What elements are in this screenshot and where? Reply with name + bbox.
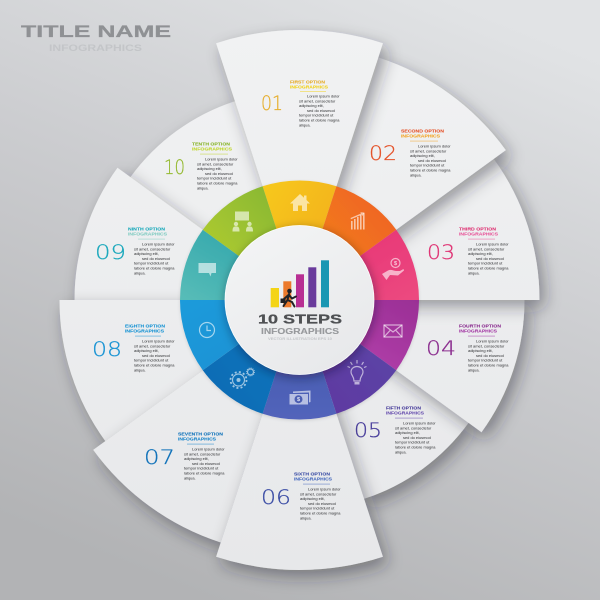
panel: sixth option xyxy=(216,300,383,570)
panel: third option: THIRD OPTION xyxy=(459,227,497,232)
panel: first option: Lorem ipsum dolor xyxy=(307,94,340,98)
panel: second option: INFOGRAPHICS xyxy=(401,134,440,139)
heading: 10 steps xyxy=(258,311,342,341)
ring segment 3 xyxy=(300,230,419,300)
panel: second option xyxy=(300,58,506,300)
panel: seventh option: aliqua. xyxy=(184,475,196,480)
heading: 10 steps: VECTOR ILLUSTRATION EPS 10 xyxy=(268,337,332,341)
panel: ninth option: NINTH OPTION xyxy=(128,227,166,232)
panel: eighth option: labore et dolore magna xyxy=(134,362,175,368)
panel: third option: sit amet, consectetur xyxy=(468,246,505,251)
panel: sixth option: sed do eiusmod xyxy=(308,501,336,506)
panel: first option: 01 xyxy=(261,92,283,115)
panel: eighth option: 08 xyxy=(92,338,122,361)
panel: eighth option: Lorem ipsum dolor xyxy=(142,338,175,344)
panel: eighth option: adipiscing elit, xyxy=(134,348,159,353)
colour ring xyxy=(180,180,419,420)
panel: seventh option: SEVENTH OPTION xyxy=(178,432,224,437)
panel: eighth option xyxy=(59,300,300,441)
panel: seventh option: sit amet, consectetur xyxy=(184,451,221,456)
panel: fifth option: tempor incididunt ut xyxy=(395,440,430,445)
icon: banknote: $ xyxy=(297,397,300,403)
panel: ninth option: INFOGRAPHICS xyxy=(128,232,167,237)
panel: fifth option xyxy=(300,300,469,499)
panel: ninth option xyxy=(74,168,300,300)
panel: ninth option: 09 xyxy=(95,241,126,264)
panel: fourth option: sit amet, consectetur xyxy=(468,343,505,348)
panel: tenth option: INFOGRAPHICS xyxy=(192,147,232,152)
ring segment 1 xyxy=(263,180,336,300)
panel: third option: INFOGRAPHICS xyxy=(459,232,498,237)
panel: second option: aliqua. xyxy=(410,172,422,177)
panel: tenth option: sit amet, consectetur xyxy=(197,161,234,166)
panel: ninth option: labore et dolore magna xyxy=(134,266,175,270)
panel: third option: tempor incididunt ut xyxy=(468,261,503,266)
icon: growth chart xyxy=(350,212,365,230)
icon: hand with coin: $ xyxy=(394,261,397,267)
panel: second option: sed do eiusmod xyxy=(418,158,446,163)
panel: fifth option: labore et dolore magna xyxy=(395,444,436,450)
icon: running businessman xyxy=(280,289,296,306)
icon: banknote xyxy=(290,390,310,404)
panel: first option: INFOGRAPHICS xyxy=(290,85,328,90)
panel: tenth option: Lorem ipsum dolor xyxy=(205,156,238,162)
ring segment 5 xyxy=(300,300,396,414)
panel: seventh option: sed do eiusmod xyxy=(192,461,220,466)
icon: people and board xyxy=(232,212,253,232)
panel: fourth option: FOURTH OPTION xyxy=(459,324,502,329)
panel: third option: Lorem ipsum dolor xyxy=(476,242,509,246)
panel: sixth option: Lorem ipsum dolor xyxy=(308,486,341,492)
panel: sixth option: labore et dolore magna xyxy=(300,510,341,516)
panel: sixth option: 06 xyxy=(261,486,291,509)
panel: sixth option: INFOGRAPHICS xyxy=(294,477,332,482)
panel: second option: 02 xyxy=(369,142,397,165)
panel: fifth option: FIFTH OPTION xyxy=(386,406,422,411)
panel: fourth option: 04 xyxy=(426,337,456,360)
panel: tenth option: aliqua. xyxy=(197,185,209,190)
panel: fourth option: aliqua. xyxy=(468,367,480,372)
panel: sixth option: SIXTH OPTION xyxy=(294,472,331,477)
panel: eighth option: sit amet, consectetur xyxy=(134,343,171,348)
panel: ninth option: aliqua. xyxy=(134,270,146,275)
panel: sixth option: adipiscing elit, xyxy=(300,496,325,501)
panel: third option: adipiscing elit, xyxy=(468,251,493,256)
panel: tenth option: labore et dolore magna xyxy=(197,180,238,186)
panel: sixth option: aliqua. xyxy=(300,515,312,520)
ring segment 7 xyxy=(203,300,300,414)
panel: second option: labore et dolore magna xyxy=(410,168,451,172)
panel: sixth option: tempor incididunt ut xyxy=(300,506,335,511)
panel: fourth option: INFOGRAPHICS xyxy=(459,329,497,334)
panel: tenth option xyxy=(130,101,300,300)
icon: house xyxy=(290,194,310,211)
panel: third option xyxy=(300,159,540,300)
panel: ninth option: adipiscing elit, xyxy=(134,251,159,256)
panel: seventh option xyxy=(93,300,300,542)
heading: 10 steps: 10 STEPS xyxy=(258,311,342,326)
panel: eighth option: EIGHTH OPTION xyxy=(125,324,166,329)
panel: fifth option: adipiscing elit, xyxy=(395,430,420,435)
panel: seventh option: INFOGRAPHICS xyxy=(178,437,216,442)
panel: ninth option: Lorem ipsum dolor xyxy=(142,242,175,246)
icon: envelope xyxy=(384,325,402,337)
panel: ninth option: tempor incididunt ut xyxy=(134,261,169,266)
panel: fifth option: Lorem ipsum dolor xyxy=(403,420,436,426)
panel: tenth option: sed do eiusmod xyxy=(205,171,233,176)
panel: tenth option: 10 xyxy=(164,156,185,179)
panel: second option: Lorem ipsum dolor xyxy=(418,144,451,148)
panel: fifth option: sit amet, consectetur xyxy=(395,425,432,430)
panel: eighth option: aliqua. xyxy=(134,367,146,372)
panel: first option: tempor incididunt ut xyxy=(299,113,334,118)
panel: fifth option: sed do eiusmod xyxy=(403,435,431,440)
ring segment 10 xyxy=(203,186,300,300)
panel: seventh option: 07 xyxy=(144,446,175,469)
panel: first option: sit amet, consectetur xyxy=(299,98,336,103)
ring segment 6 xyxy=(263,300,336,420)
ring segment 2 xyxy=(300,186,396,300)
title: TITLE NAME xyxy=(21,22,171,41)
panel: fourth option: tempor incididunt ut xyxy=(468,358,503,363)
ring segment 8 xyxy=(180,300,300,370)
panel: fifth option: INFOGRAPHICS xyxy=(386,411,424,416)
panel: fifth option: 05 xyxy=(354,419,382,442)
panel: ninth option: sed do eiusmod xyxy=(142,256,170,261)
panel: first option: labore et dolore magna xyxy=(299,118,340,122)
panel: seventh option: labore et dolore magna xyxy=(184,470,225,476)
icon: speech bubble xyxy=(198,263,216,276)
panel: eighth option: INFOGRAPHICS xyxy=(125,329,164,334)
panel: first option xyxy=(216,30,383,300)
panel: first option: FIRST OPTION xyxy=(290,80,326,85)
panel: fourth option: adipiscing elit, xyxy=(468,348,493,353)
panel: eighth option: tempor incididunt ut xyxy=(134,358,169,363)
panel: third option: sed do eiusmod xyxy=(476,256,504,261)
panel: ninth option: sit amet, consectetur xyxy=(134,246,171,251)
panel: first option: sed do eiusmod xyxy=(307,108,335,113)
panel: tenth option: tempor incididunt ut xyxy=(197,176,232,181)
title xyxy=(21,22,171,53)
panel: eighth option: sed do eiusmod xyxy=(142,353,170,358)
panel: tenth option: TENTH OPTION xyxy=(192,142,231,147)
panel: third option: 03 xyxy=(427,241,455,264)
panel: second option: adipiscing elit, xyxy=(410,153,435,158)
panel: fourth option: sed do eiusmod xyxy=(476,353,504,358)
bar chart xyxy=(271,260,329,307)
panel: fourth option: Lorem ipsum dolor xyxy=(476,338,509,344)
panel: sixth option: sit amet, consectetur xyxy=(300,491,337,496)
panel: seventh option: Lorem ipsum dolor xyxy=(192,446,225,452)
ring segment 4 xyxy=(300,300,419,370)
icon: hand with coin xyxy=(382,258,404,280)
centre circle xyxy=(225,226,374,374)
panel: second option: sit amet, consectetur xyxy=(410,148,447,153)
icon: light bulb xyxy=(348,360,366,384)
panel: third option: aliqua. xyxy=(468,270,480,275)
panel: first option: aliqua. xyxy=(299,122,311,127)
ring segment 9 xyxy=(180,230,300,300)
panel: third option: labore et dolore magna xyxy=(468,266,509,270)
icon: gears xyxy=(230,368,254,388)
panel: fifth option: aliqua. xyxy=(395,449,407,454)
panel: second option: tempor incididunt ut xyxy=(410,163,445,168)
panel: second option: SECOND OPTION xyxy=(401,129,445,134)
icon: clock xyxy=(200,322,214,338)
panel: tenth option: adipiscing elit, xyxy=(197,166,222,171)
panel: first option: adipiscing elit, xyxy=(299,103,324,108)
panel: fourth option xyxy=(300,300,524,432)
panel: seventh option: tempor incididunt ut xyxy=(184,466,219,471)
panel: seventh option: adipiscing elit, xyxy=(184,456,209,461)
heading: 10 steps: INFOGRAPHICS xyxy=(261,327,340,336)
panel: fourth option: labore et dolore magna xyxy=(468,362,509,368)
title: INFOGRAPHICS xyxy=(49,43,142,53)
